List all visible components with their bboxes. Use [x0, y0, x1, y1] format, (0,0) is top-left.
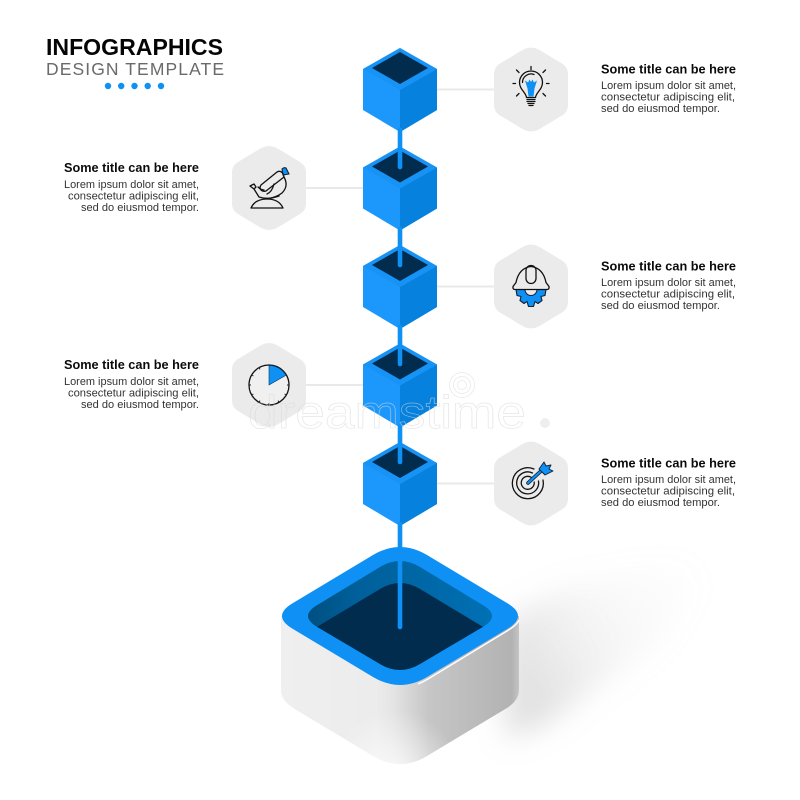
text 3: consectetur adipiscing elit,: [601, 288, 735, 300]
watermark: [248, 372, 550, 438]
text 4: sed do eiusmod tempor.: [81, 399, 199, 411]
inner wall: [308, 561, 492, 670]
text 5: sed do eiusmod tempor.: [601, 497, 720, 509]
text 3: sed do eiusmod tempor.: [601, 300, 720, 312]
text 4: [64, 357, 199, 411]
text 3: Lorem ipsum dolor sit amet,: [601, 277, 736, 289]
icon: clock: [249, 365, 289, 405]
watermark: dreamstime: [248, 386, 526, 438]
text 5: Lorem ipsum dolor sit amet,: [601, 474, 736, 486]
icon: microscope: [250, 168, 289, 208]
text 4: Lorem ipsum dolor sit amet,: [64, 376, 199, 388]
icon: helmet with gear: [513, 266, 549, 306]
hexagon 4: timer: [232, 343, 306, 427]
text 2: Some title can be here: [64, 160, 199, 175]
cube 2: [363, 146, 437, 230]
text 5: [601, 456, 736, 509]
base container: [281, 547, 519, 764]
text 1: Some title can be here: [601, 62, 736, 76]
text 1: Lorem ipsum dolor sit amet,: [601, 80, 736, 92]
subheading: design template: DESIGN TEMPLATE: [46, 59, 224, 79]
text 3: Some title can be here: [601, 258, 736, 274]
base body lower highlight: [281, 680, 519, 764]
cube 3: [363, 245, 437, 329]
base opening: [308, 561, 492, 670]
icon: light bulb: [513, 66, 549, 106]
floor shadow of base: [505, 550, 730, 740]
text 2: consectetur adipiscing elit,: [68, 190, 199, 202]
cube 1: [363, 48, 437, 132]
text 5: consectetur adipiscing elit,: [601, 486, 735, 498]
text 1: [601, 62, 736, 115]
connector lines to hexagons: [305, 90, 495, 484]
icon: target with arrow: [512, 462, 553, 499]
cube 5: [363, 442, 437, 526]
text 1: consectetur adipiscing elit,: [601, 92, 735, 104]
base blue rim: [282, 547, 518, 685]
text 2: [64, 160, 199, 214]
text 1: sed do eiusmod tempor.: [601, 103, 720, 115]
hexagon 2: microscope: [232, 146, 306, 230]
base rim highlight: [418, 620, 519, 684]
text 2: sed do eiusmod tempor.: [81, 202, 199, 214]
hexagon 5: target: [494, 442, 568, 525]
inner floor: [317, 583, 483, 670]
text 2: Lorem ipsum dolor sit amet,: [64, 179, 199, 191]
heading: infographics: INFOGRAPHICS: [46, 34, 223, 60]
text 4: consectetur adipiscing elit,: [68, 388, 199, 400]
vertical blue stem: [398, 130, 402, 627]
hexagon 1: idea: [494, 48, 568, 131]
text 3: [601, 258, 736, 312]
hexagon 3: helmet: [494, 245, 568, 328]
title dots: [105, 83, 164, 89]
text 5: Some title can be here: [601, 456, 736, 470]
title block: [46, 34, 224, 89]
text 4: Some title can be here: [64, 357, 199, 372]
base body: [281, 616, 519, 764]
cube 4: [363, 344, 437, 428]
